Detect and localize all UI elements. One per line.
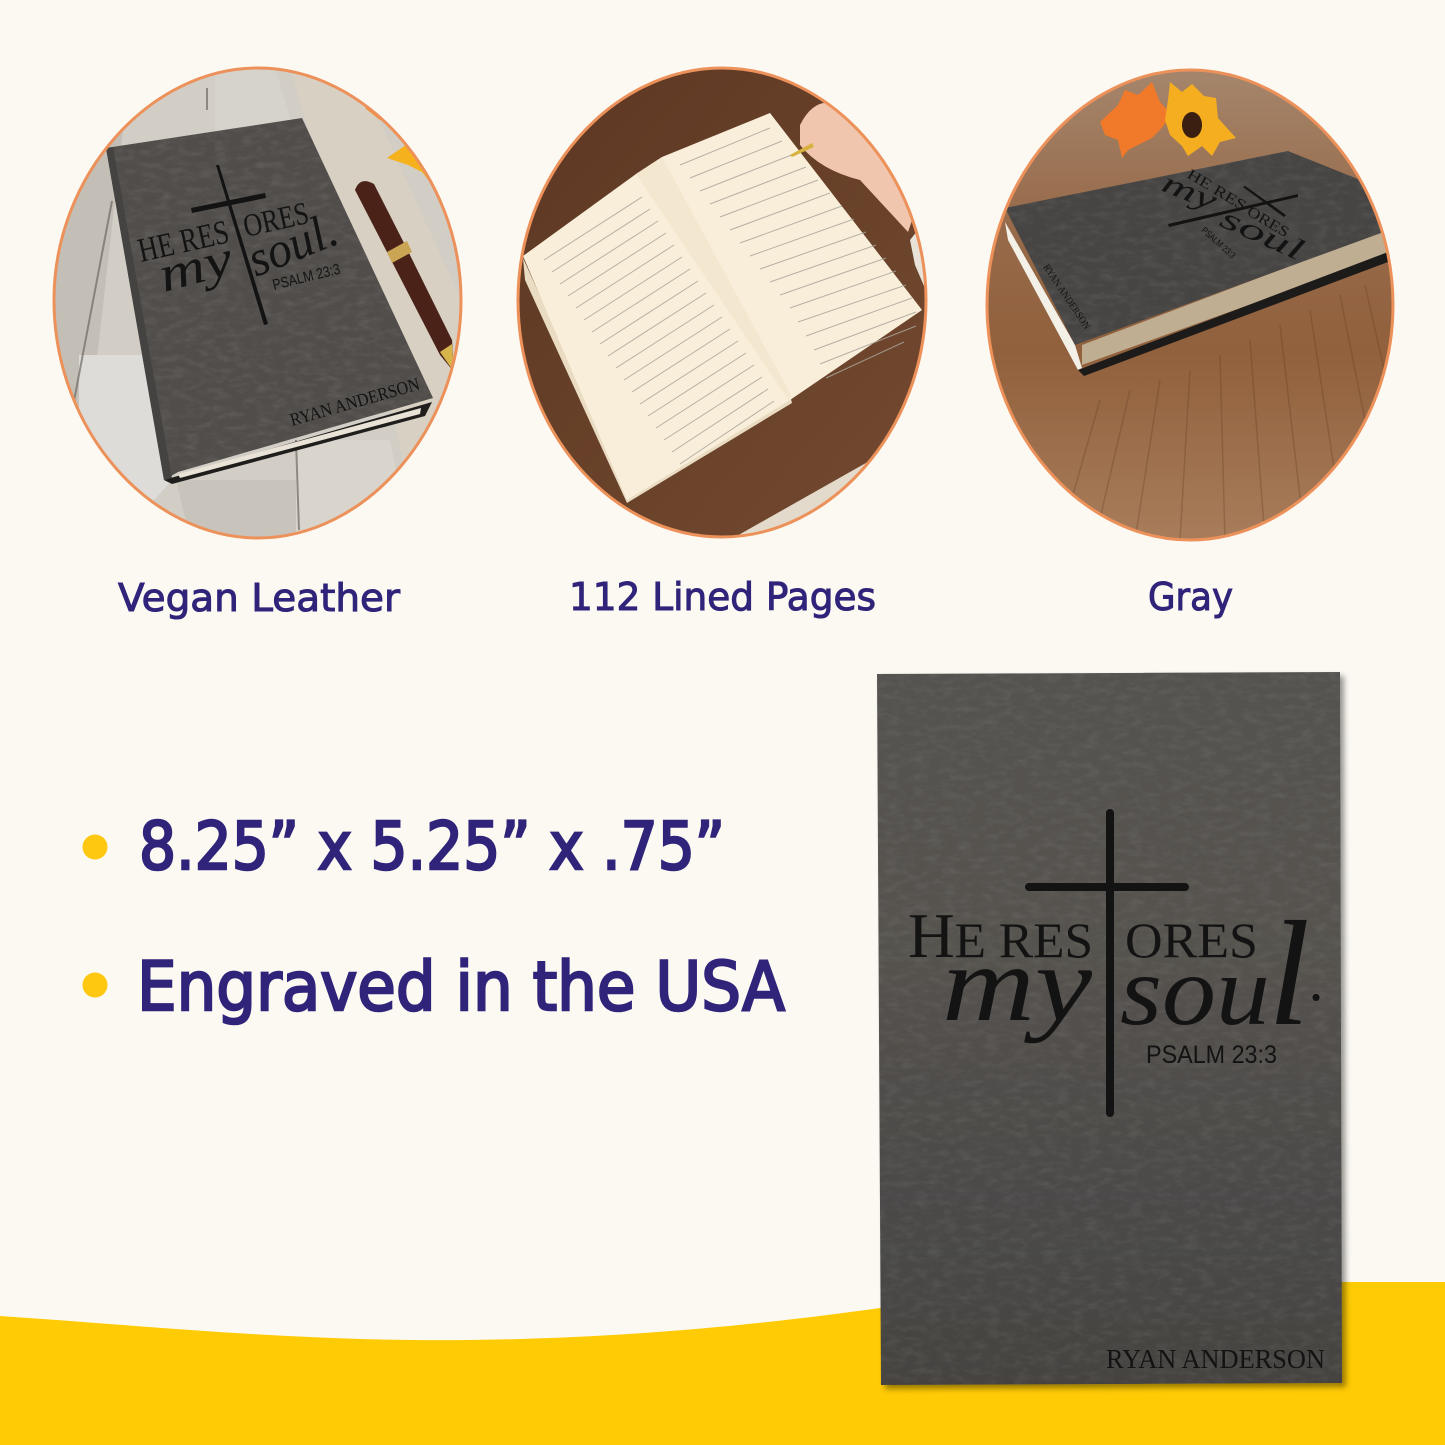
large journal front cover xyxy=(877,672,1342,1385)
bullet: engraved: Engraved in the USA xyxy=(137,948,785,1027)
journal: PSALM 23:3 xyxy=(271,261,342,294)
journal: PSALM 23:3 xyxy=(1200,225,1238,261)
hand with pen xyxy=(790,102,915,232)
journal xyxy=(1005,151,1400,376)
engraved verse: PSALM 23:3 xyxy=(1146,1041,1277,1069)
engraved script: sou xyxy=(1120,935,1270,1046)
pen xyxy=(355,181,454,372)
journal xyxy=(106,118,433,484)
engraved script: l xyxy=(1268,891,1310,1057)
flower xyxy=(1100,82,1236,158)
engraved script xyxy=(942,891,1325,1057)
bullet: dimensions: 8.25” x 5.25” x .75” xyxy=(139,808,725,885)
yellow wave footer xyxy=(0,1282,1445,1445)
journal: RYAN ANDERSON xyxy=(1041,263,1092,332)
engraved title: HE RES xyxy=(908,901,1093,971)
caption: gray: Gray xyxy=(1148,575,1233,619)
engraved name: RYAN ANDERSON xyxy=(1106,1344,1325,1374)
journal: my xyxy=(1157,166,1223,218)
photo: open lined notebook xyxy=(518,68,930,545)
journal: HE RES xyxy=(135,214,233,270)
photo: gray journal on wood table xyxy=(987,70,1400,540)
journal: HE RES xyxy=(1184,167,1249,214)
caption: vegan leather: Vegan Leather xyxy=(118,576,400,620)
photo: vegan leather journal on white wood xyxy=(54,68,461,538)
engraved title: ORES xyxy=(1125,912,1258,968)
engraved script: my xyxy=(942,925,1092,1044)
journal: ORES xyxy=(240,194,312,244)
journal: my xyxy=(152,229,239,303)
journal: soul. xyxy=(239,201,345,287)
engraved script: . xyxy=(1310,947,1325,1013)
flower petals xyxy=(365,108,428,180)
notebook pages xyxy=(523,113,922,503)
caption: lined pages: 112 Lined Pages xyxy=(569,575,876,619)
cross xyxy=(1025,809,1189,1117)
engraved title xyxy=(908,901,1258,971)
journal: ORES xyxy=(1244,204,1292,241)
journal: RYAN ANDERSON xyxy=(288,374,422,430)
journal: soul xyxy=(1215,201,1309,267)
